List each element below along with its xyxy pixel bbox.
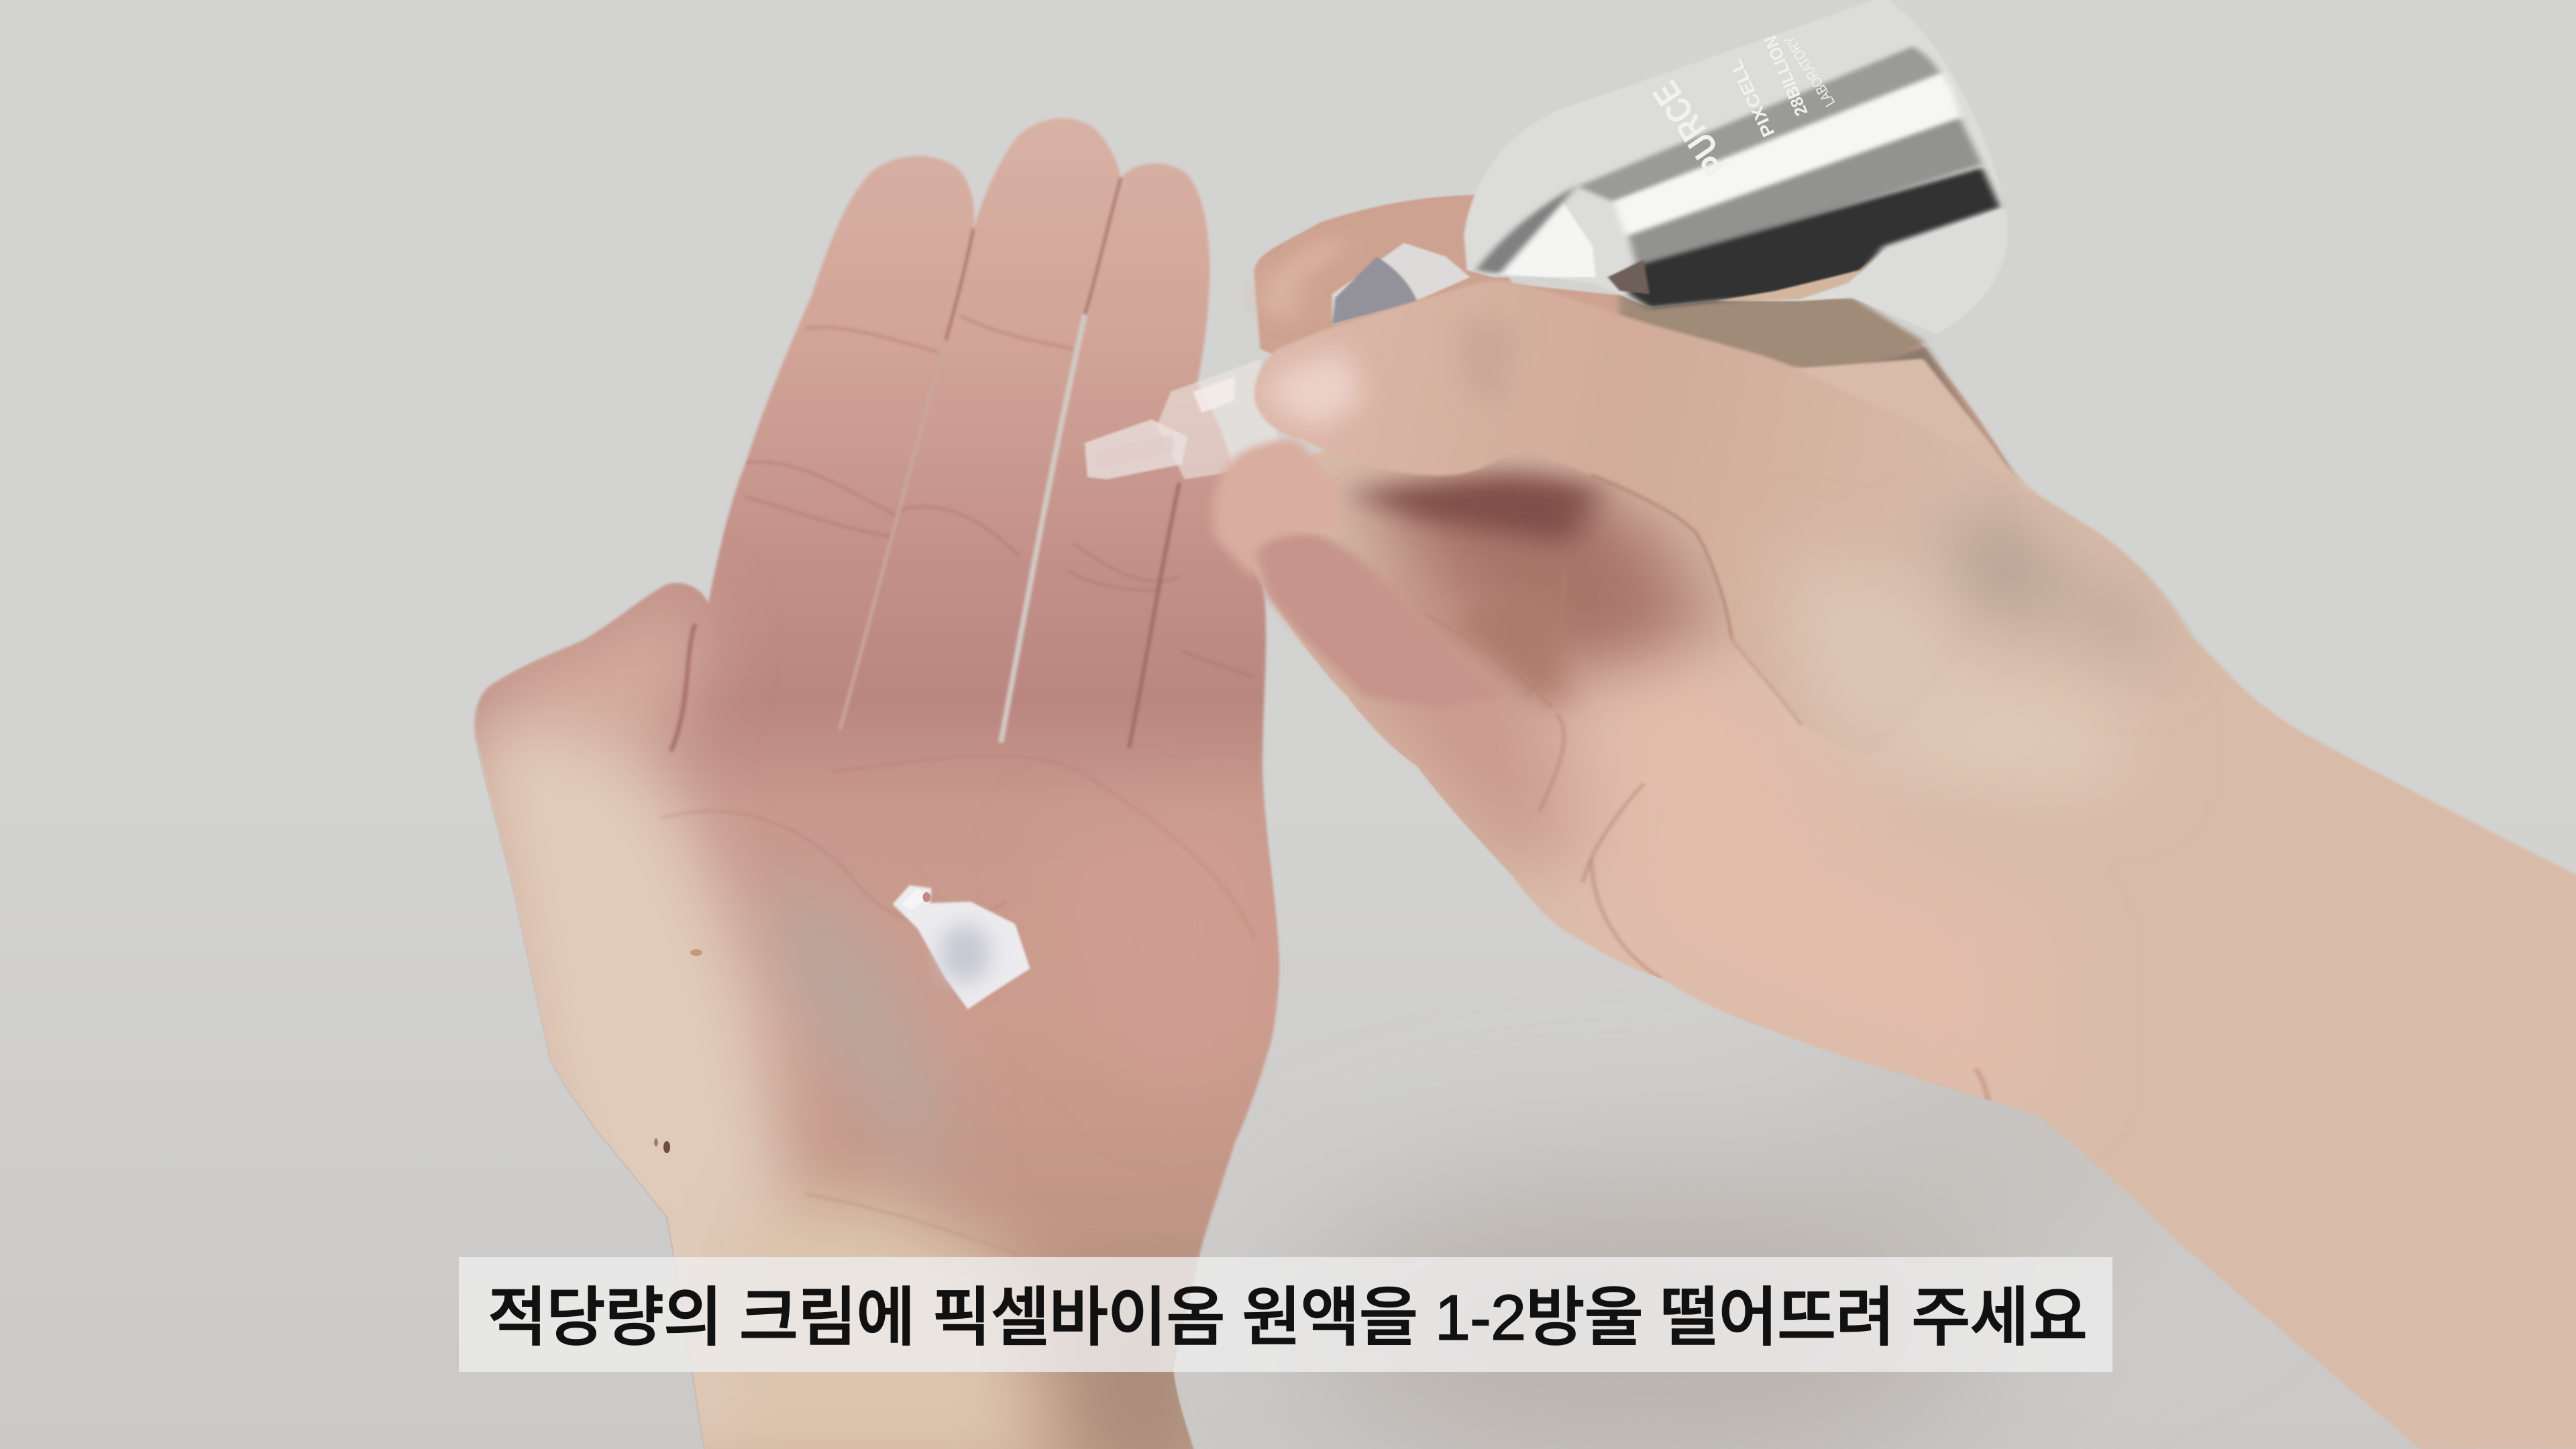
bottle body [1464,0,2008,333]
left hand [463,118,1279,1449]
left hand silhouette [475,118,1279,1449]
right lower fingertips [1213,439,1504,708]
right hand and forearm [1225,359,2576,1449]
moles on left wrist [654,949,702,1153]
background shadow under hands [1295,1006,2214,1449]
gaps between left fingers [840,178,1179,748]
bottle cap [1332,243,1470,325]
cream dollop [893,885,1030,1010]
subtitle background [459,1257,2112,1372]
left hand creases and finger joints [661,315,1254,1254]
bottle label: PIXCELL [1725,56,1778,140]
right hand fingers behind bottle [1254,195,2021,486]
bottle label: LABORATORY [1781,32,1838,110]
subtitle text: 적당량의 크림에 픽셀바이옴 원액을 1-2방울 떨어뜨려 주세요 [488,1282,2088,1354]
bottle label: 28BILLION [1760,33,1812,119]
left hand shading [463,178,1275,1449]
bottle label [1646,32,1838,182]
dropper tip [1085,360,1279,479]
bottle label: PURCE [1646,74,1737,182]
right hand [1213,281,2576,1449]
subtitle box [459,1257,2112,1372]
right hand creases [1426,568,1993,1110]
right thumb [1254,281,2026,755]
bottle [1332,0,2008,333]
right thumb nail and knuckle detail [1778,510,2167,771]
right thumb creases [1591,475,1801,725]
